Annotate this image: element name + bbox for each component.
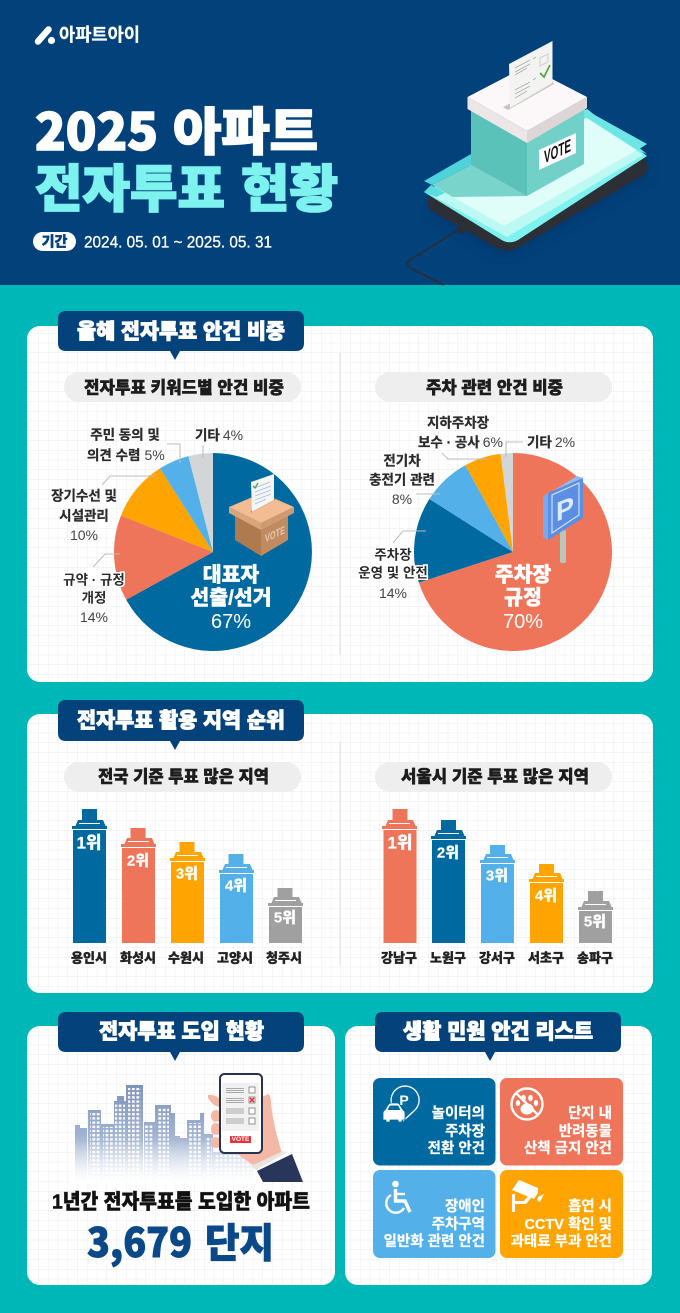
subheading: parking pie (375, 372, 612, 402)
bar: 고양시 4위: 고양시 (217, 950, 253, 966)
card: CCTV check on smoking: 과태료 부과 안건 (511, 1233, 612, 1250)
subheading: Seoul (375, 762, 612, 792)
pie chart: parking share (414, 453, 612, 651)
label: 주민 동의 및 의견 수렴 5%: 주민 동의 및 (90, 428, 160, 442)
card: CCTV check on smoking: CCTV 확인 및 (524, 1216, 612, 1233)
VOTE sign (539, 133, 576, 170)
label: 규약·규정 개정 14% (63, 572, 125, 625)
icon: parking sign (543, 476, 583, 563)
subheading: keyword pie (64, 372, 301, 402)
bar: 강서구 3위 (479, 845, 515, 966)
card: CCTV check on smoking: 흡연 시 (568, 1198, 612, 1215)
card: CCTV check on smoking (500, 1170, 623, 1258)
illustration: hand holding voting phone: VOTE (232, 1136, 250, 1143)
label: 장기수선 및 시설관리 10% (51, 488, 117, 543)
VOTE sign: VOTE (544, 136, 571, 168)
leader lines: keyword pie (93, 444, 203, 567)
slice label: 주차장 규정 70%: 규정 (504, 586, 542, 610)
subheading: national: 전국 기준 투표 많은 지역 (98, 768, 269, 786)
ballot box lid (468, 97, 527, 143)
label: 주민 동의 및 의견 수렴 5%: 의견 수렴 5% (87, 447, 165, 463)
bar: 노원구 2위 (430, 820, 466, 966)
label: 규약·규정 개정 14%: 14% (80, 609, 108, 625)
card: disabled parking: 일반화 관련 안건 (384, 1233, 485, 1250)
bar: 청주시 5위: 청주시 (266, 950, 302, 966)
title: 2025 (35, 91, 158, 165)
label: 주차장 운영 및 안전 14% (358, 548, 428, 601)
bar: 수원시 3위: 3위 (176, 866, 198, 882)
bar chart: Seoul ranking (381, 809, 613, 966)
card: playground to parking: 놀이터의 (432, 1105, 485, 1122)
label: 장기수선 및 시설관리 10%: 장기수선 및 (51, 488, 117, 504)
bar: 서초구 4위 (528, 864, 564, 966)
bar: 노원구 2위: 노원구 (430, 950, 466, 966)
big number: 3,679 단지: 단지 (205, 1211, 274, 1269)
slice label: 주차장 규정 70% (495, 564, 551, 633)
bar: 강남구 1위: 강남구 (381, 950, 417, 966)
subheading: parking pie: 주차 관련 안건 비중 (426, 378, 563, 398)
period badge and dates: 기간 (42, 234, 67, 250)
title (35, 91, 338, 222)
card: disabled parking: 장애인 (445, 1198, 485, 1215)
subheading: national (64, 762, 301, 792)
bar: 노원구 2위: 2위 (437, 844, 459, 862)
card: playground to parking: 전환 안건 (428, 1140, 485, 1157)
bar: 화성시 2위 (120, 828, 156, 966)
panel: civil complaint agenda list (345, 1012, 652, 1285)
label: 지하주차장 보수·공사 6%: 지하주차장 (427, 416, 490, 430)
label: 규약·규정 개정 14%: 규약 · 규정 (63, 572, 125, 588)
bar: 강서구 3위: 강서구 (479, 950, 515, 966)
bar: 용인시 1위 (71, 809, 107, 966)
slice label: 대표자 선출/선거 67%: 67% (211, 611, 251, 633)
label: 전기차 충전기 관련 8%: 8% (392, 491, 412, 507)
label: 규약·규정 개정 14%: 개정 (82, 590, 106, 606)
label: 지하주차장 보수·공사 6%: 보수 · 공사6% (418, 434, 503, 450)
icon: parking sign: P (556, 490, 574, 528)
ballot box body (471, 108, 527, 196)
bar: 고양시 4위 (217, 854, 254, 966)
icon: cardboard ballot box: VOTE (265, 525, 285, 545)
bar: 송파구 5위: 송파구 (577, 950, 613, 966)
section heading: 전자투표 도입 현황 (58, 1012, 304, 1061)
title: 전자투표 (35, 148, 225, 222)
card: no pets walking: 단지 내 (568, 1105, 612, 1122)
bar: 강남구 1위 (381, 809, 417, 966)
label: 주민 동의 및 의견 수렴 5% (87, 428, 165, 463)
ballot paper (509, 41, 552, 108)
label: 기타 2%: 기타2% (527, 434, 575, 450)
subheading: Seoul: 서울시 기준 투표 많은 지역 (401, 768, 589, 786)
label: 주차장 운영 및 안전 14%: 주차장 (374, 548, 412, 562)
bar: 수원시 3위: 수원시 (168, 950, 204, 966)
card: playground to parking (373, 1078, 496, 1166)
logo: 아파트아이: 아파트아이 (59, 25, 140, 45)
caption: 1년간 전자투표를 도입한 아파트 (52, 1190, 310, 1214)
title: 아파트 (173, 91, 318, 165)
bar: 화성시 2위: 2위 (127, 852, 149, 870)
illustration: apartment skyline (70, 1085, 270, 1183)
icon: cardboard ballot box (229, 474, 294, 556)
bar: 서초구 4위: 4위 (535, 888, 557, 904)
section heading: 올해 전자투표 안건 비중 (58, 311, 304, 360)
bar: 수원시 3위 (168, 842, 205, 966)
label: 전기차 충전기 관련 8%: 전기차 (383, 454, 421, 468)
icon: no paw sign (512, 1088, 542, 1120)
panel: agenda share (27, 311, 653, 682)
slice label: 대표자 선출/선거 67% (190, 564, 272, 633)
card: no pets walking: 산책 금지 안건 (524, 1140, 612, 1157)
label: 전기차 충전기 관련 8%: 충전기 관련 (369, 472, 435, 488)
card: no pets walking (500, 1078, 623, 1166)
big number: 3,679 단지 (87, 1211, 274, 1269)
bar: 강남구 1위: 1위 (387, 834, 413, 852)
section heading: 전자투표 도입 현황: 전자투표 도입 현황 (99, 1020, 264, 1044)
label: 장기수선 및 시설관리 10%: 10% (70, 527, 98, 543)
slice label: 주차장 규정 70%: 주차장 (495, 564, 551, 586)
section heading: 전자투표 활용 지역 순위: 전자투표 활용 지역 순위 (77, 710, 285, 732)
card: disabled parking (373, 1170, 496, 1258)
bar: 고양시 4위: 4위 (225, 878, 247, 894)
icon: parking pin and car: P (399, 1092, 409, 1108)
bar chart: national ranking (71, 809, 303, 966)
section heading: 생활 민원 안건 리스트 (375, 1012, 621, 1061)
big number: 3,679 단지: 3,679 (87, 1211, 192, 1269)
card: playground to parking: 주차장 (445, 1123, 485, 1140)
slice label: 주차장 규정 70%: 70% (503, 611, 543, 633)
label: 장기수선 및 시설관리 10%: 시설관리 (59, 508, 109, 524)
label: 주차장 운영 및 안전 14%: 운영 및 안전 (358, 566, 428, 580)
pie chart: keyword share (114, 453, 312, 651)
icon: CCTV camera (512, 1180, 544, 1212)
bar: 화성시 2위: 화성시 (120, 950, 156, 966)
header banner (0, 0, 680, 285)
title: 현황 (241, 148, 338, 222)
leader lines: parking pie (393, 442, 523, 543)
bar: 강서구 3위: 3위 (486, 868, 508, 884)
section heading: 올해 전자투표 안건 비중: 올해 전자투표 안건 비중 (77, 320, 285, 344)
label: 전기차 충전기 관련 8% (369, 454, 435, 507)
illustration: ballot box on smartphone (408, 41, 650, 285)
slice label: 대표자 선출/선거 67%: 선출/선거 (190, 586, 272, 610)
slice label: 대표자 선출/선거 67%: 대표자 (203, 564, 259, 586)
bar: 송파구 5위: 5위 (584, 914, 606, 930)
illustration: hand holding voting phone (208, 1074, 303, 1182)
label: 기타 4%: 기타4% (195, 427, 243, 443)
bar: 청주시 5위 (266, 888, 303, 966)
panel: adoption status (27, 1012, 335, 1285)
label: 지하주차장 보수·공사 6% (418, 416, 503, 450)
subheading: keyword pie: 전자투표 키워드별 안건 비중 (84, 378, 284, 398)
bar: 서초구 4위: 서초구 (528, 950, 564, 966)
bar: 용인시 1위: 용인시 (71, 950, 107, 966)
panel: regional ranking (27, 700, 653, 993)
section heading: 전자투표 활용 지역 순위 (58, 700, 304, 750)
bar: 청주시 5위: 5위 (274, 910, 296, 926)
label: 주차장 운영 및 안전 14%: 14% (379, 585, 407, 601)
card: disabled parking: 주차구역 (432, 1216, 485, 1233)
bar: 용인시 1위: 1위 (76, 834, 102, 852)
icon: wheelchair (386, 1181, 410, 1213)
card: no pets walking: 반려동물 (559, 1123, 612, 1140)
section heading: 생활 민원 안건 리스트: 생활 민원 안건 리스트 (403, 1020, 593, 1044)
period badge and dates: 2024. 05. 01 ~ 2025. 05. 31 (84, 232, 272, 252)
bar: 송파구 5위 (577, 891, 613, 966)
